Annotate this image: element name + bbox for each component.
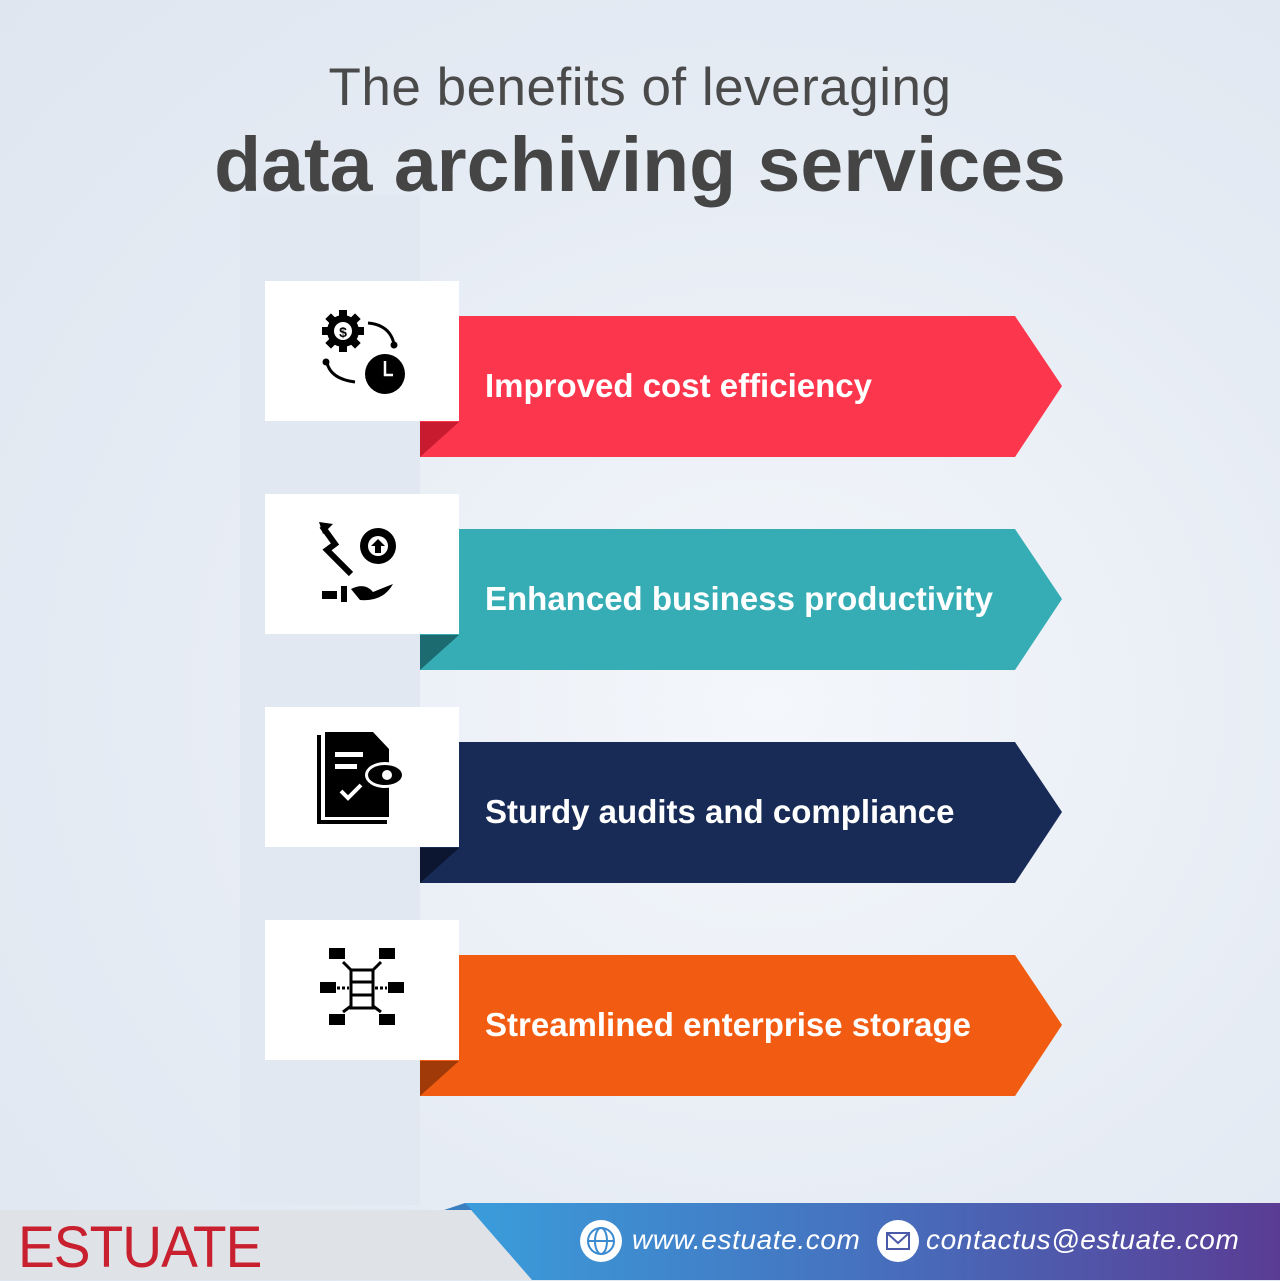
- email: contactus@estuate.com: [926, 1224, 1239, 1255]
- title: The benefits of leveraging: [329, 58, 951, 117]
- vertical panel: [240, 195, 420, 1205]
- logo area: [0, 1210, 540, 1280]
- banner: Enhanced business productivity: [485, 580, 993, 617]
- icon box: $: [339, 324, 347, 340]
- row 3: audits: [265, 707, 1062, 883]
- title: data archiving services: [214, 122, 1066, 208]
- banner: [420, 955, 1062, 1096]
- banner: Streamlined enterprise storage: [485, 1006, 971, 1043]
- website: www.estuate.com: [632, 1224, 860, 1255]
- banner: Improved cost efficiency: [485, 367, 872, 404]
- banner: Sturdy audits and compliance: [485, 793, 954, 830]
- icon box: [265, 707, 459, 847]
- banner: [420, 316, 1062, 457]
- logo: ESTUATE: [18, 1215, 261, 1280]
- banner: [420, 529, 1062, 670]
- icon box: [265, 494, 459, 634]
- footer: [0, 1203, 1280, 1280]
- row 4: storage: [265, 920, 1062, 1096]
- email: [877, 1220, 1239, 1262]
- icon box: [265, 281, 459, 421]
- title: [214, 58, 1066, 208]
- website: [580, 1220, 860, 1262]
- row 1: cost efficiency: [265, 281, 1062, 457]
- contact band: [444, 1203, 1280, 1280]
- icon box: [265, 920, 459, 1060]
- banner: [420, 742, 1062, 883]
- row 2: productivity: [265, 494, 1062, 670]
